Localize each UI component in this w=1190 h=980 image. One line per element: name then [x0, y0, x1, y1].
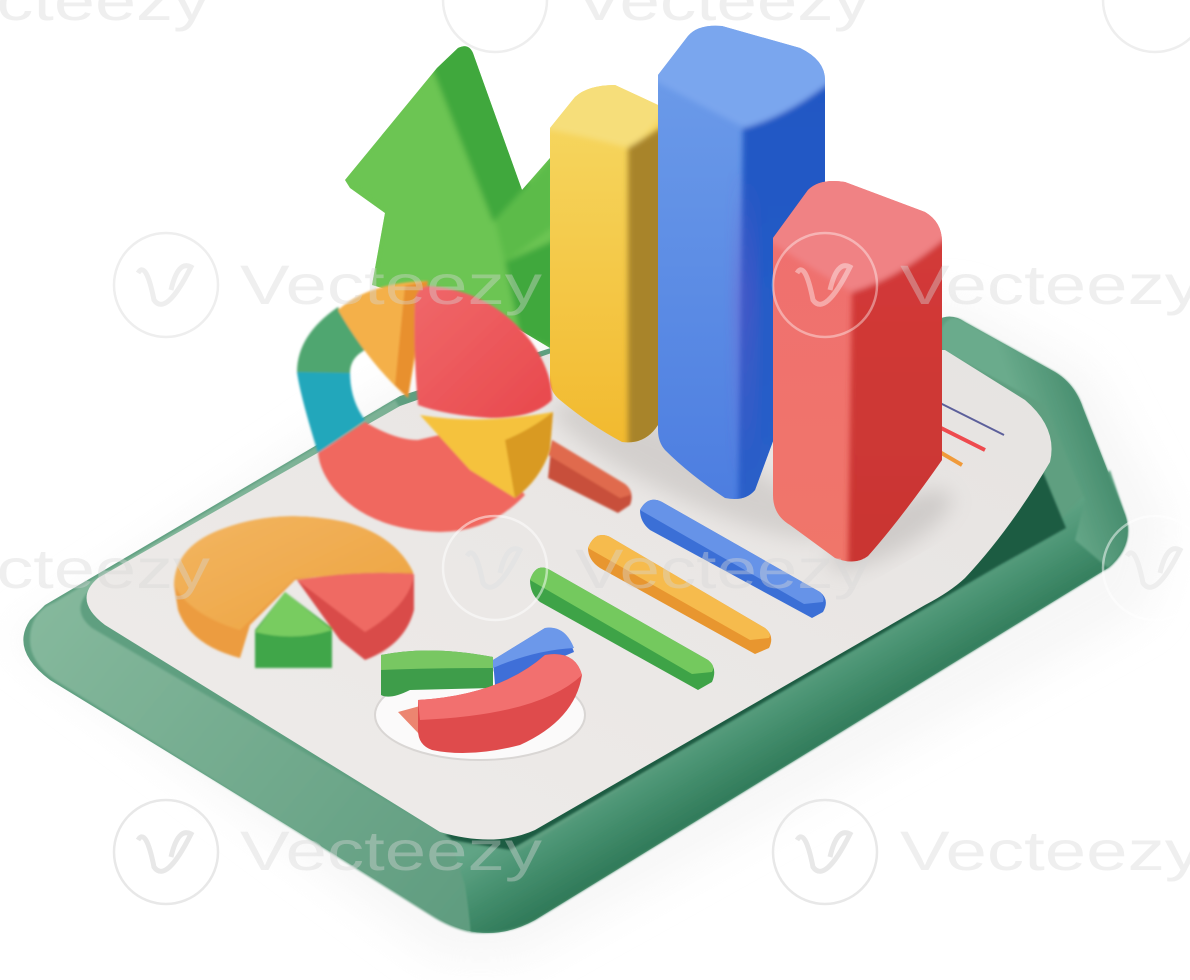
orange slice — [174, 516, 413, 658]
green slice — [255, 592, 332, 668]
donut red segment — [318, 422, 525, 532]
red segment — [398, 706, 420, 735]
donut chart — [297, 281, 553, 532]
list bar: blue — [640, 500, 826, 618]
arrow dark side — [432, 40, 530, 222]
donut green segment — [297, 307, 365, 373]
tray — [23, 317, 1128, 933]
red slice — [297, 573, 414, 660]
donut orange segment — [338, 281, 428, 398]
list bar: green — [530, 568, 714, 690]
bar: yellow — [550, 85, 658, 442]
paper sheet — [87, 350, 1052, 840]
donut yellow wedge — [420, 412, 553, 498]
bar: blue — [658, 26, 825, 499]
donut teal segment — [297, 372, 365, 453]
green segment — [381, 650, 493, 697]
watermark text: Vecteezy — [575, 537, 870, 600]
tray back-right rim — [942, 318, 1128, 568]
tray outer body — [23, 317, 1128, 933]
list bar: dark red — [548, 440, 632, 513]
tray right rim — [450, 470, 1128, 933]
mini lines top right — [938, 403, 1004, 465]
watermark text: Vecteezy — [900, 819, 1190, 882]
blue segment — [493, 628, 574, 685]
bar: red — [773, 181, 942, 562]
tray inner shadow well — [440, 465, 1066, 850]
watermark text: Vecteezy — [900, 253, 1190, 316]
watermark text: Vecteezy — [240, 253, 542, 316]
pie chart: left — [174, 516, 414, 668]
watermark text: Vecteezy — [240, 819, 542, 882]
list bar: orange — [588, 535, 771, 654]
shadows on paper — [541, 379, 962, 584]
background halo — [10, 300, 1170, 960]
tray left rim — [30, 400, 470, 932]
small donut chart — [375, 628, 585, 760]
arrow: green growth — [340, 40, 555, 355]
arrow main face — [345, 73, 433, 288]
donut red wedge — [414, 286, 552, 418]
